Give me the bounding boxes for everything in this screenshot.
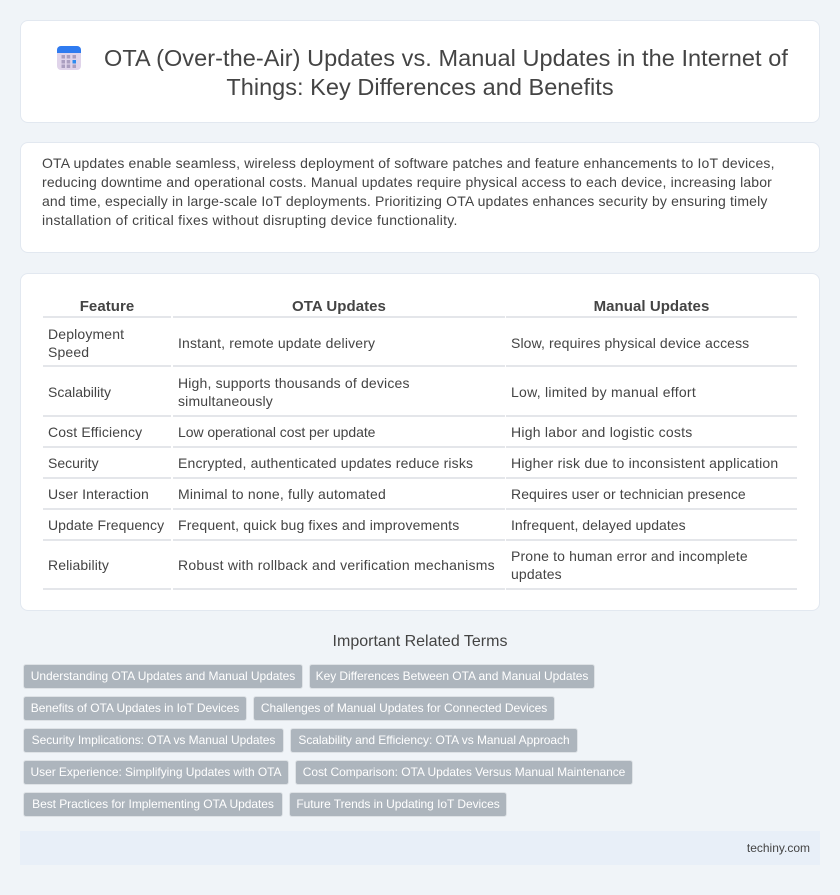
intro text: installation of critical fixes without disrupting device functionality.	[42, 212, 458, 228]
table rules	[43, 316, 797, 590]
table header: Manual Updates: Manual Updates	[594, 298, 709, 315]
row: Security: Higher risk due to inconsistent application	[511, 455, 778, 471]
row: User Interaction: Requires user or technician presence	[511, 486, 746, 502]
row: Update Frequency: Frequent, quick bug fixes and improvements	[178, 517, 459, 533]
footer bar	[20, 831, 820, 865]
row: Update Frequency: Update Frequency	[48, 517, 164, 533]
row: Cost Efficiency: Cost Efficiency	[48, 424, 142, 440]
intro text: OTA updates enable seamless, wireless deployment of software patches and feature enhancements to IoT devices,	[42, 155, 775, 171]
row: Reliability: Robust with rollback and verification mechanisms	[178, 557, 495, 573]
row: Deployment Speed: Slow, requires physical device access	[511, 335, 749, 351]
related terms tags: Security Implications: OTA vs Manual Updates	[32, 733, 275, 747]
title: OTA (Over-the-Air) Updates vs. Manual Updates in the Internet of	[104, 45, 788, 71]
intro text	[42, 155, 775, 228]
footer site name: techiny.com	[747, 841, 810, 855]
title	[104, 45, 788, 100]
icon: calendar	[57, 46, 81, 70]
title: Things: Key Differences and Benefits	[226, 74, 614, 100]
row: Security: Encrypted, authenticated updates reduce risks	[178, 455, 473, 471]
heading: related terms: Important Related Terms	[333, 633, 507, 650]
related terms tags: Key Differences Between OTA and Manual Updates	[316, 669, 588, 683]
related terms tags	[23, 664, 633, 817]
row: Update Frequency: Infrequent, delayed updates	[511, 517, 686, 533]
row: Update Frequency	[48, 517, 686, 533]
related terms tags: Future Trends in Updating IoT Devices	[296, 797, 500, 811]
table header: Feature: Feature	[80, 298, 134, 315]
row: Deployment Speed: Speed	[48, 344, 89, 360]
related terms tags: Cost Comparison: OTA Updates Versus Manual Maintenance	[303, 765, 625, 779]
row: Scalability	[48, 375, 696, 409]
row: Cost Efficiency: Low operational cost per update	[178, 424, 375, 440]
intro panel	[20, 142, 820, 253]
row: Reliability: Prone to human error and incomplete	[511, 548, 748, 564]
row: Cost Efficiency: High labor and logistic costs	[511, 424, 693, 440]
row: Security	[48, 455, 778, 471]
row: Deployment Speed: Deployment	[48, 326, 124, 342]
table header: OTA Updates: OTA Updates	[292, 298, 386, 315]
intro text: reducing downtime and operational costs. Manual updates require physical access to each device, increasing labor	[42, 174, 772, 190]
row: Scalability: Low, limited by manual effort	[511, 384, 696, 400]
row: Reliability: Reliability	[48, 557, 109, 573]
row: Security: Security	[48, 455, 99, 471]
related terms tags: Challenges of Manual Updates for Connected Devices	[261, 701, 547, 715]
row: Deployment Speed: Instant, remote update delivery	[178, 335, 375, 351]
comparison table panel	[20, 273, 820, 611]
related terms tags: Scalability and Efficiency: OTA vs Manual Approach	[298, 733, 570, 747]
row: Reliability: updates	[511, 566, 562, 582]
row: Cost Efficiency	[48, 424, 693, 440]
row: Scalability: Scalability	[48, 384, 111, 400]
intro text: and time, especially in large-scale IoT deployments. Prioritizing OTA updates enhances security by ensuring timely	[42, 193, 767, 209]
related terms tags: Benefits of OTA Updates in IoT Devices	[31, 701, 239, 715]
row: Scalability: High, supports thousands of devices	[178, 375, 410, 391]
row: Reliability	[48, 548, 748, 582]
header panel	[20, 20, 820, 123]
row: User Interaction: User Interaction	[48, 486, 149, 502]
row: User Interaction	[48, 486, 746, 502]
related terms tags: Understanding OTA Updates and Manual Updates	[31, 669, 295, 683]
row: Deployment Speed	[48, 326, 749, 360]
row: Scalability: simultaneously	[178, 393, 273, 409]
row: User Interaction: Minimal to none, fully automated	[178, 486, 386, 502]
related terms tags: Best Practices for Implementing OTA Updates	[32, 797, 274, 811]
related terms tags: User Experience: Simplifying Updates with OTA	[31, 765, 281, 779]
